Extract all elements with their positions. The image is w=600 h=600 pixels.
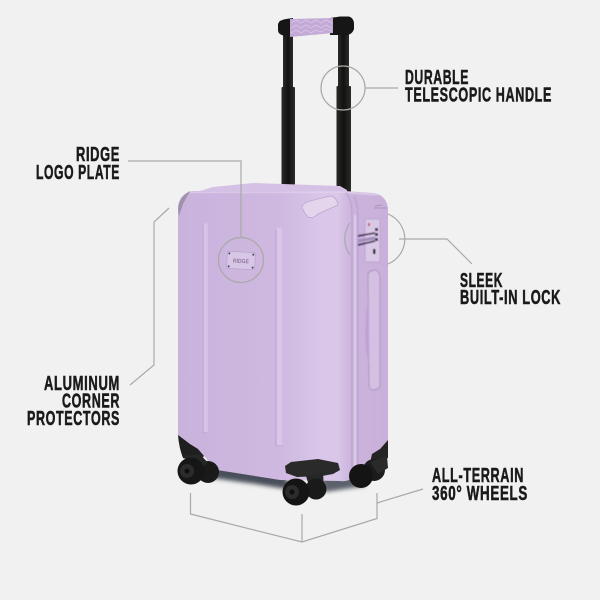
callout leader line [399,239,472,264]
callout text: LOGO PLATE [36,162,120,184]
callout: telescopic handle [321,66,552,110]
callout marker circle [218,238,264,282]
handle caps [278,16,354,37]
callout text: CORNER [62,390,120,412]
callout: logo plate [36,144,264,282]
callout text: PROTECTORS [27,408,120,430]
callout text: ALL-TERRAIN [432,465,524,487]
telescopic handle [278,16,354,192]
front left wheel [178,458,204,484]
floor shadow [205,462,366,492]
top edge highlight [190,192,378,195]
body seam [346,193,358,476]
callout leader line [377,489,423,503]
right pole [336,33,351,192]
front foot guard [285,459,340,477]
suitcase [178,16,388,506]
left pole [282,34,295,185]
top right side bump [374,205,387,208]
callout text: RIDGE [76,144,120,166]
callout leader line [130,208,169,385]
callout text: 360° WHEELS [432,483,528,505]
side handle [365,270,380,390]
logo plate: RIDGE [233,259,249,265]
callout text [36,144,120,184]
callout: wheels [190,465,528,542]
right groove [276,228,282,447]
left groove [203,223,208,434]
top left corner protector [178,191,190,216]
callout: lock [345,214,561,309]
callout text [27,373,120,430]
top corner protector [302,196,338,218]
front centre wheels [282,472,326,506]
callout text: DURABLE [405,67,469,89]
callout leader line [128,161,241,238]
callout leader line [365,87,398,89]
built-in lock [358,219,380,262]
callout: corner protectors [27,208,169,430]
right bottom corner [370,440,388,463]
callout text [432,465,528,505]
left bottom corner [178,435,204,462]
callout text: ALUMINUM [44,373,120,395]
suitcase body [178,191,388,481]
back right wheels [349,456,388,488]
callout marker arc [345,214,405,264]
back left wheel [184,454,219,483]
wheel bracket [190,493,377,542]
lilac grip [290,18,333,37]
suitcase lid top [200,183,347,196]
callout text [405,67,552,106]
callout text [460,270,561,309]
logo plate [227,251,255,270]
callout text: SLEEK [460,270,503,292]
callout marker circle [321,66,365,110]
